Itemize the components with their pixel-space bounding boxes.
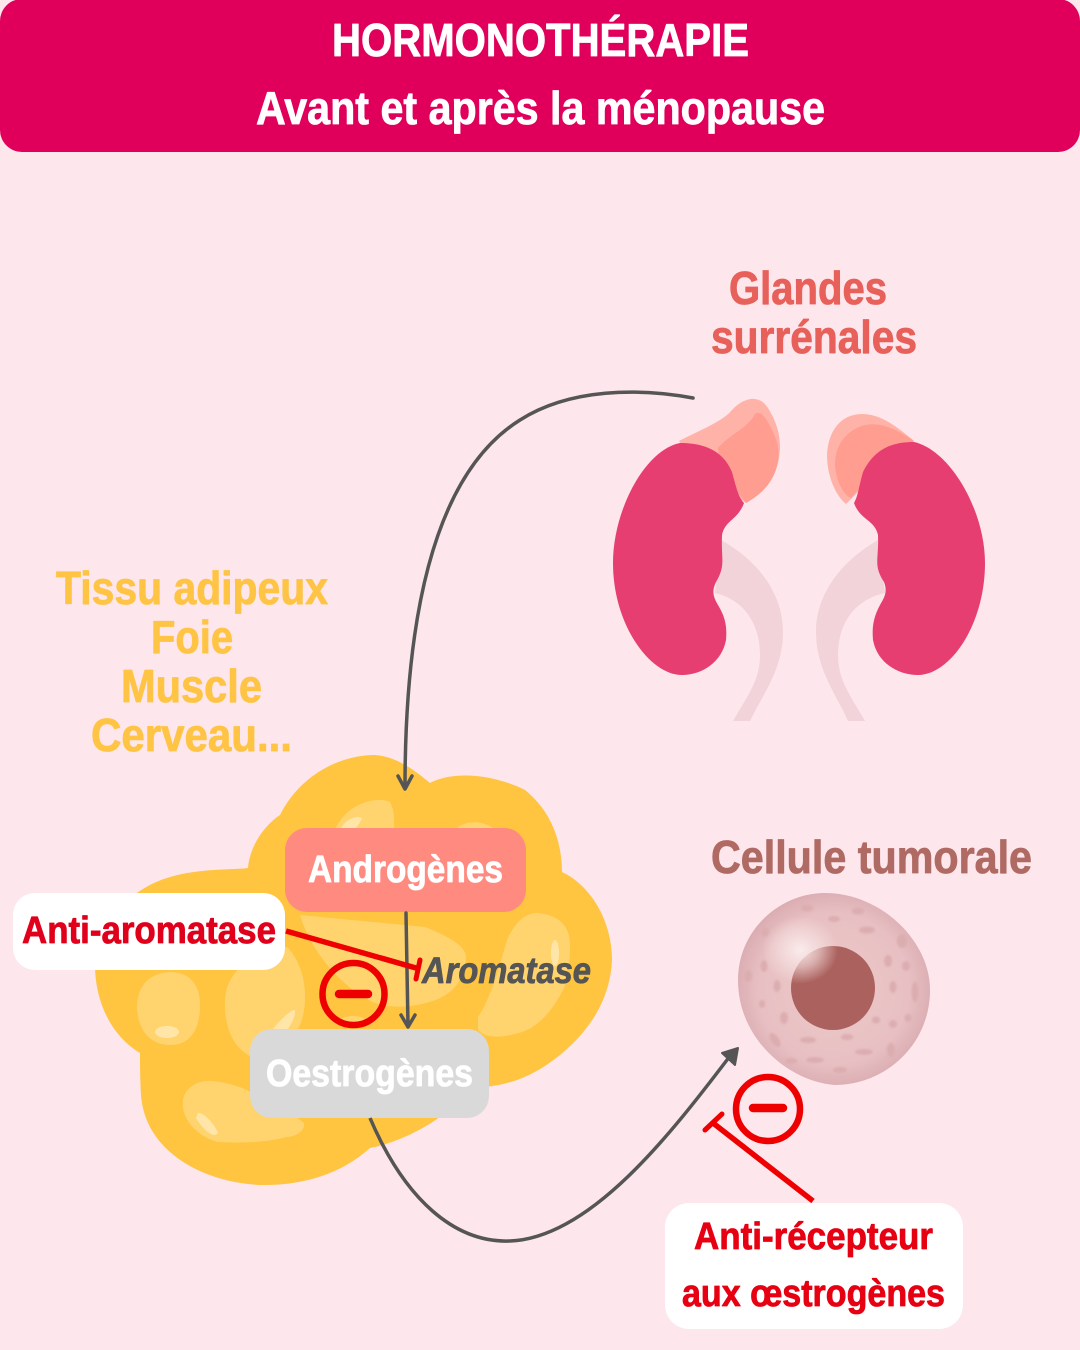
inhibition line: anti-aromatase (286, 931, 420, 979)
heading: glandes surrénales (711, 262, 917, 363)
subtitle: Avant et après la ménopause (256, 82, 825, 134)
callout: anti-récepteur aux œstrogènes (665, 1203, 963, 1329)
cell granules (744, 904, 918, 1073)
left ureter (715, 540, 783, 721)
box: oestrogènes (250, 1029, 489, 1118)
lobule highlights (155, 817, 559, 1135)
fat outline (95, 755, 612, 1185)
right ureter (816, 540, 885, 721)
highlight (762, 916, 838, 984)
callout: anti-aromatase (13, 893, 285, 970)
icon: adipose tissue (95, 755, 612, 1185)
inhibition line: anti-récepteur (705, 1114, 813, 1201)
left adrenal (679, 399, 780, 503)
callout: anti-récepteur aux œstrogènes: Anti-récepteur (694, 1216, 933, 1258)
icon: minus sign aromatase (322, 963, 384, 1025)
heading: tissu adipeux: Foie (151, 611, 233, 663)
box: oestrogènes: Oestrogènes (266, 1053, 473, 1095)
left kidney (613, 443, 744, 675)
heading: tissu adipeux: Tissu adipeux (56, 562, 328, 614)
icon: tumour cell (738, 893, 930, 1085)
arrow: androgens to oestrogens (401, 913, 415, 1027)
heading: tissu adipeux: Muscle (121, 660, 262, 712)
right kidney (854, 442, 985, 675)
heading: cellule tumorale: Cellule tumorale (711, 831, 1032, 883)
title: HORMONOTHÉRAPIE (332, 14, 749, 66)
box: androgènes: Androgènes (308, 849, 503, 891)
callout: anti-aromatase: Anti-aromatase (22, 910, 276, 952)
arrow: oestrogens to tumour cell (370, 1048, 738, 1241)
heading: tissu adipeux: Cerveau... (91, 709, 292, 761)
arrow: adrenal glands to androgens (398, 392, 693, 789)
box: androgènes (285, 828, 526, 912)
heading: tissu adipeux (56, 562, 328, 761)
label: aromatase: Aromatase (421, 950, 591, 991)
right adrenal (827, 414, 914, 504)
title banner (0, 0, 1080, 152)
heading: glandes surrénales: Glandes (729, 262, 887, 314)
fat lobules (137, 800, 570, 1142)
icon: minus sign receptor (736, 1077, 800, 1141)
icon: kidneys and adrenal glands (613, 399, 985, 721)
heading: glandes surrénales: surrénales (711, 311, 917, 363)
callout: anti-récepteur aux œstrogènes: aux œstrogènes (682, 1273, 945, 1315)
nucleus (791, 946, 875, 1030)
